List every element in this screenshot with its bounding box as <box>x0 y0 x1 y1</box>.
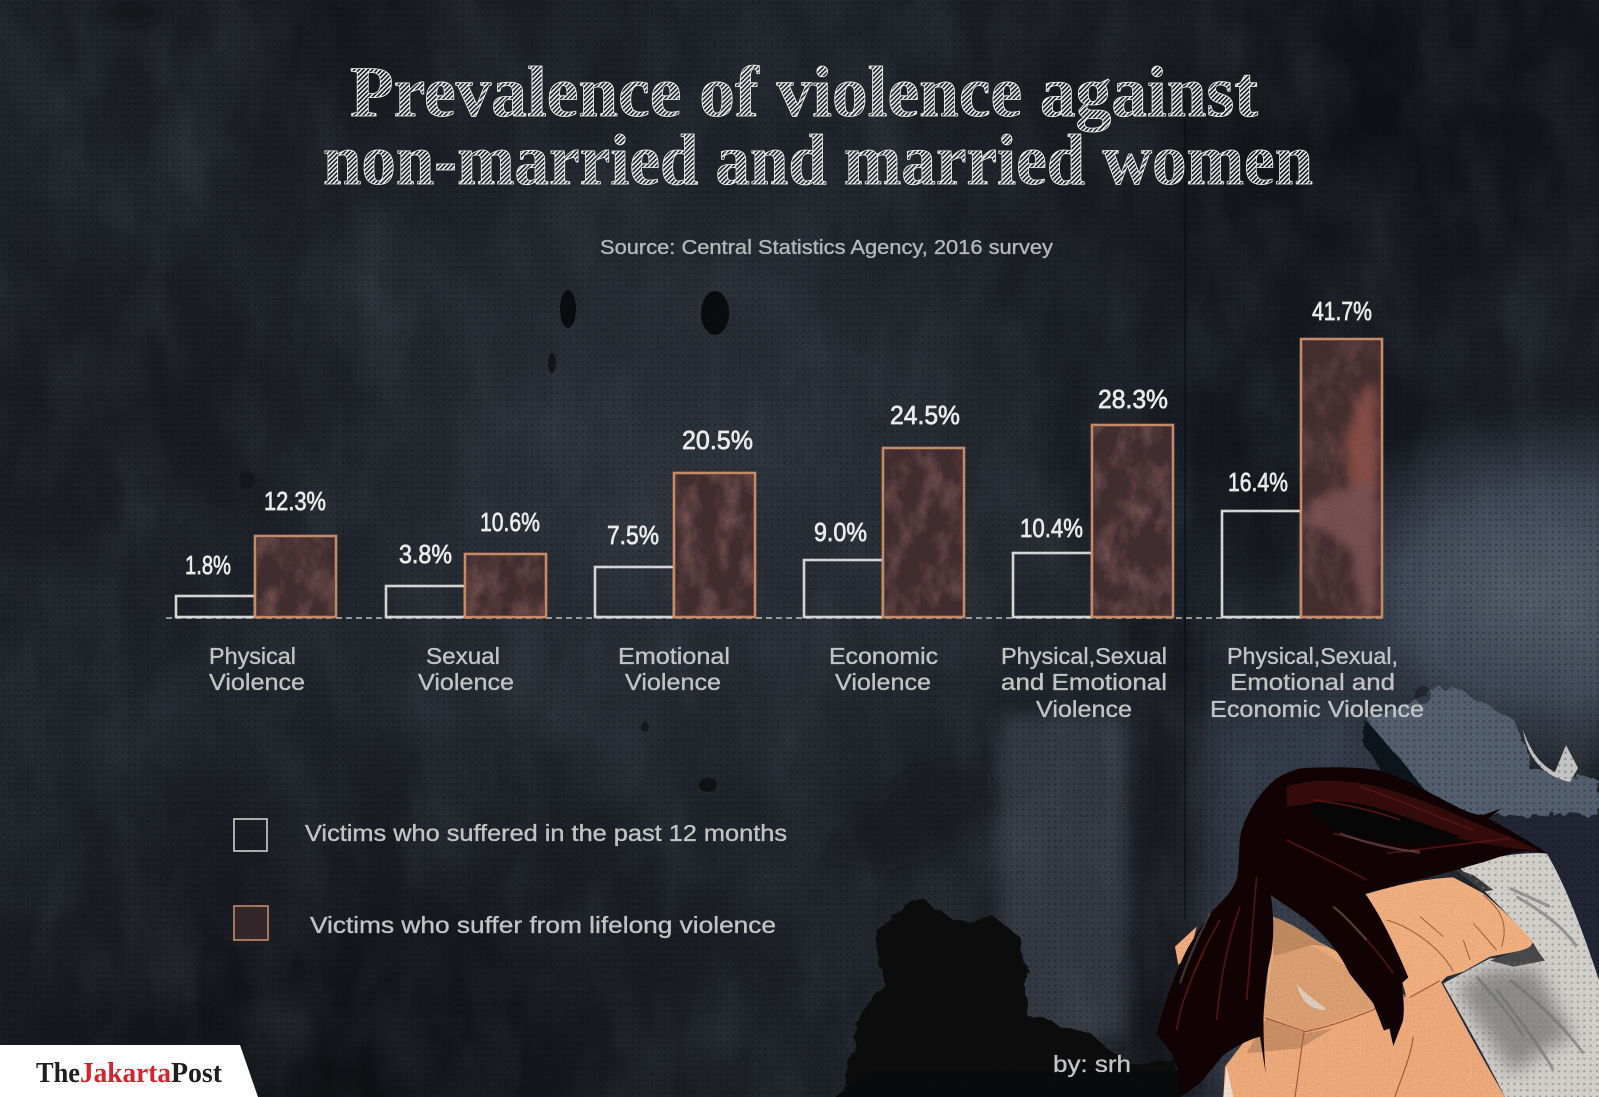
group: sexual violence: Violence <box>418 669 514 695</box>
group: emotional violence: Emotional <box>618 643 730 669</box>
group: economic violence: 24.5% <box>890 400 960 430</box>
group: physical, sexual and emotional violence: Violence <box>1036 696 1132 722</box>
byline: by: srh <box>1053 1051 1131 1077</box>
group: emotional violence: Violence <box>625 669 721 695</box>
logo: The Jakarta Post: Jakarta <box>80 1058 171 1089</box>
group: physical violence <box>176 486 336 695</box>
group: physical violence: 12.3% <box>264 486 326 516</box>
illustration: shirt <box>1443 853 1599 1097</box>
group: economic violence <box>804 400 964 695</box>
legend: lifelong violence <box>234 906 776 940</box>
group: all four forms of violence: Physical,Sexual, <box>1227 643 1398 669</box>
group: all four forms of violence: Emotional and <box>1230 669 1395 695</box>
group: physical, sexual and emotional violence: 28.3% <box>1098 384 1168 414</box>
group: emotional violence: 7.5% <box>607 520 659 550</box>
group: emotional violence <box>595 425 755 695</box>
logo: The Jakarta Post: Post <box>171 1058 223 1089</box>
logo: The Jakarta Post: The <box>36 1058 80 1089</box>
group: all four forms of violence <box>1210 296 1424 722</box>
title: Prevalence of violence against <box>350 52 1258 132</box>
legend: past 12 months <box>234 819 787 851</box>
illustration: hair <box>1157 767 1548 1097</box>
legend: past 12 months: Victims who suffered in the past 12 months <box>305 820 787 846</box>
illustration: arm <box>1363 877 1533 998</box>
group: economic violence: 9.0% <box>814 517 867 547</box>
group: sexual violence: Sexual <box>426 643 500 669</box>
group: physical, sexual and emotional violence <box>1001 384 1173 722</box>
group: all four forms of violence: Economic Violence <box>1210 696 1424 722</box>
group: physical, sexual and emotional violence: and Emotional <box>1001 669 1167 695</box>
group: sexual violence <box>386 507 546 695</box>
title: non-married and married women <box>323 120 1313 200</box>
group: economic violence: Violence <box>835 669 931 695</box>
group: sexual violence: 3.8% <box>399 539 452 569</box>
bar chart <box>166 296 1424 722</box>
group: all four forms of violence: 16.4% <box>1228 467 1288 497</box>
group: physical, sexual and emotional violence: Physical,Sexual <box>1001 643 1167 669</box>
illustration: skin dot screen <box>1223 877 1533 1097</box>
source note: Source: Central Statistics Agency, 2016 survey <box>600 237 1053 259</box>
background: grey watercolour wash <box>1362 685 1599 1000</box>
legend <box>234 819 787 940</box>
group: physical, sexual and emotional violence: 10.4% <box>1020 513 1083 543</box>
group: emotional violence: 20.5% <box>682 425 753 455</box>
illustration: legs and torso <box>1175 917 1505 1097</box>
group: physical violence: Physical <box>209 643 296 669</box>
group: sexual violence: 10.6% <box>480 507 540 537</box>
group: physical violence: Violence <box>209 669 305 695</box>
group: economic violence: Economic <box>829 643 938 669</box>
legend: lifelong violence: Victims who suffer from lifelong violence <box>310 912 776 938</box>
title <box>323 52 1313 200</box>
group: physical violence: 1.8% <box>185 550 231 580</box>
illustration: woman with head on her arm <box>1157 767 1599 1097</box>
group: all four forms of violence: 41.7% <box>1312 296 1372 326</box>
chart baseline <box>166 617 1386 619</box>
logo: The Jakarta Post <box>0 1045 258 1097</box>
